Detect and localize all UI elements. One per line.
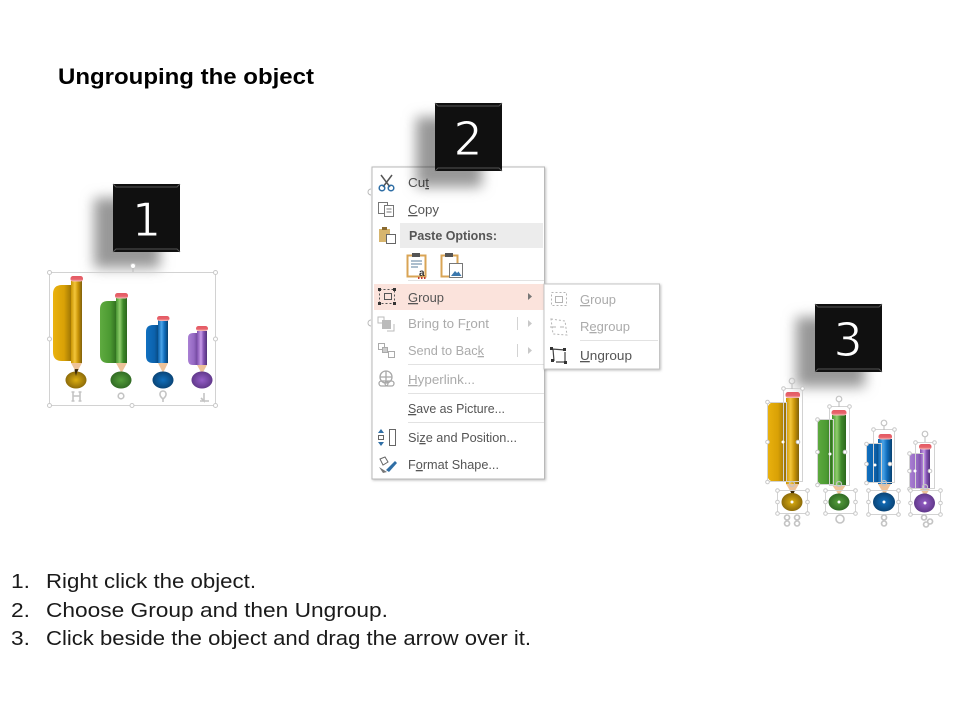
pencil: purple [188,326,212,388]
group submenu arrow [528,293,532,300]
instructions list: 3. [11,628,30,650]
group highlight row [374,284,544,310]
group submenu: Group [580,292,616,307]
icon: paste picture [442,253,462,278]
pencil: green [100,293,132,388]
purple small icon [922,515,933,527]
menu labels: Hyperlink... [408,372,475,387]
menu labels: Paste Options: [409,228,497,243]
icon: scissors [379,175,394,191]
blue selection handles [865,420,900,516]
instructions list [11,571,531,650]
green small icon [836,515,844,523]
instructions list: Click beside the object and drag the arrow over it. [46,628,531,650]
paste options band [400,223,543,248]
badge 1: 1 [132,193,161,247]
main context menu [372,167,544,479]
icon: send to back [378,344,394,358]
badge 2: 2 [453,112,483,166]
instructions list: 2. [11,600,30,622]
icon: bring to front [378,317,394,331]
purple selection handles [908,431,942,516]
pencil: blue [146,316,174,388]
menu labels: Bring to Front [408,316,489,331]
ungrouped pencil: purple [908,431,942,527]
badge 2 [416,103,502,187]
icon: submenu regroup [550,319,567,335]
group submenu: Regroup [580,319,630,334]
icon: paste keep text [408,253,426,279]
group submenu: Ungroup [580,348,632,363]
selection handles behind menu [368,189,371,326]
badge 3 [796,304,882,387]
icon: paste [379,227,396,244]
title: Ungrouping the object [58,64,315,89]
green selection handles [816,396,857,515]
blue small icon [882,515,887,526]
gold selection handles [766,378,809,515]
menu labels: Save as Picture... [408,401,505,416]
ungrouped pencil: green [816,396,857,523]
menu labels: Group [408,290,444,305]
menu labels: Cut [408,175,429,190]
panel: step 3 ungrouped object [766,304,942,527]
menu labels [408,175,517,472]
gold small icon [785,515,800,526]
selection frame [48,264,218,408]
group submenu [544,284,660,369]
menu labels: Copy [408,202,440,217]
icon: size and position [378,429,396,446]
instructions list: 1. [11,571,30,593]
menu labels: Send to Back [408,343,484,358]
menu labels: Format Shape... [408,457,499,472]
instructions list: Choose Group and then Ungroup. [46,600,388,622]
icon: paste keep text: a [419,268,425,279]
icon: submenu ungroup [550,347,567,364]
icon: submenu group [552,292,566,306]
panel: step 2 context menu [368,103,660,479]
icon: group [378,288,396,305]
pencil: gold [53,276,86,388]
disabled submenu arrows [517,317,532,357]
pencil icons row [72,391,209,402]
ungrouped pencil: gold [766,378,809,526]
icon: copy [378,202,394,216]
badge 3: 3 [833,313,863,367]
menu labels: Size and Position... [408,430,517,445]
icon: hyperlink [379,371,394,386]
ungrouped pencil: blue [865,420,900,526]
badge 1 [94,184,180,268]
panel: step 1 grouped object [48,184,218,408]
instructions list: Right click the object. [46,571,256,593]
icon: format shape [379,457,397,473]
